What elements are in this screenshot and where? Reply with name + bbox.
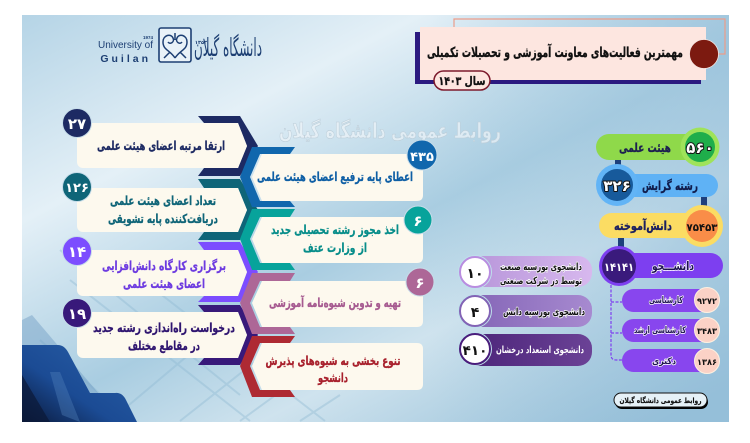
stat: هیئت علمی	[596, 128, 720, 166]
sub stat: کارشناسی: کارشناسی	[649, 296, 684, 306]
card: درخواست راه‌اندازی: در مقاطع مختلف	[128, 338, 200, 353]
pill: بورسیه صنعت: توسط در شرکت صنعتی	[500, 276, 582, 287]
card: تعداد اعضای	[62, 172, 258, 240]
stat: رشته گرایش: ۳۲۶	[603, 177, 631, 195]
pill: استعداد درخشان	[458, 332, 592, 366]
decoration: bottom-left dark shapes	[22, 315, 137, 422]
stat: رشته گرایش	[596, 164, 718, 206]
stat: دانش‌آموخته: ۷۵۴۵۳	[686, 222, 718, 234]
card: درخواست راه‌اندازی: ۱۹	[68, 305, 86, 323]
stat: دانشجو: دانشـــجو	[651, 259, 694, 274]
pill: بورسیه صنعت: ۱۰	[466, 266, 484, 282]
card: اخذ مجوز	[240, 206, 432, 270]
dashed tree connector	[611, 285, 622, 360]
stat: هیئت علمی: هیئت علمی	[619, 140, 671, 155]
logo: University of Guilan	[98, 28, 262, 65]
card: تنوع بخشی: دانشجو	[317, 370, 348, 385]
pill: بورسیه دانش	[458, 294, 592, 328]
logo English text	[98, 35, 153, 65]
card: ارتقا مرتبه: ۲۷	[68, 115, 86, 133]
card: تهیه و تدوین: تهیه و تدوین شیوه‌نامه آموزشی	[269, 295, 401, 310]
pill: استعداد درخشان: ۴۱۰	[463, 343, 487, 359]
card: تعداد اعضای: دریافت‌کننده پایه تشویقی	[108, 211, 218, 226]
stat: هیئت علمی: ۵۶۰	[686, 139, 714, 157]
logo English text: Guilan	[100, 53, 151, 65]
stat: دانش‌آموخته: دانش‌آموخته	[614, 218, 672, 233]
card: درخواست راه‌اندازی: درخواست راه‌اندازی رشته جدید	[93, 320, 235, 335]
card: برگزاری کارگاه: اعضای هیئت علمی	[123, 276, 205, 291]
year badge	[434, 71, 490, 90]
card: برگزاری کارگاه: ۱۴	[68, 243, 86, 261]
sub stat: کارشناسی ارشد	[622, 318, 720, 342]
card: ارتقا مرتبه: ارتقا مرتبه اعضای هیئت علمی	[97, 138, 225, 153]
card: تعداد اعضای: تعداد اعضای هیئت علمی	[110, 193, 216, 208]
sub stat: کارشناسی ارشد: ۳۴۸۳	[697, 327, 718, 337]
sub stat: کارشناسی ارشد: کارشناسی ارشد	[634, 326, 687, 336]
pill: بورسیه دانش: ۴	[471, 305, 480, 321]
year badge: سال ۱۴۰۳	[438, 74, 486, 88]
card: اعطای پایه: اعطای پایه ترفیع اعضای هیئت علمی	[257, 169, 413, 184]
sub stat: کارشناسی	[622, 288, 720, 312]
card: درخواست راه‌اندازی	[62, 298, 258, 365]
connectors	[615, 158, 707, 254]
logo emblem	[159, 28, 191, 62]
pill: بورسیه دانش: دانشجوی بورسیه دانش	[503, 307, 585, 318]
stat: دانشجو: ۱۴۱۴۱	[604, 260, 634, 274]
title panel	[415, 19, 725, 90]
card: تنوع بخشی	[240, 336, 423, 397]
sub stat: دکتری: دکتری	[652, 357, 676, 367]
text: دانشگاه گیلان	[194, 33, 262, 62]
sub stat: دکتری	[622, 348, 720, 374]
card: اعطای پایه: ۴۳۵	[410, 150, 434, 165]
pill: بورسیه صنعت: دانشجوی بورسیه صنعت	[500, 262, 582, 273]
stat: دانشجو	[599, 246, 723, 286]
watermark: روابط عمومی دانشگاه گیلان	[279, 118, 501, 143]
card: اخذ مجوز: اخذ مجوز رشته تحصیلی جدید	[271, 222, 399, 237]
card: تنوع بخشی: تنوع بخشی به شیوه‌های پذیرش	[266, 353, 400, 368]
card: تهیه و تدوین: ۶	[415, 274, 425, 292]
card: اخذ مجوز: از وزارت عتف	[303, 240, 367, 255]
logo English text: University of	[98, 40, 153, 51]
title circle	[690, 40, 718, 68]
sub stat: کارشناسی: ۹۲۷۲	[697, 297, 718, 307]
card: ارتقا مرتبه	[62, 108, 258, 176]
card: برگزاری کارگاه	[62, 236, 258, 302]
stat: دانش‌آموخته	[599, 205, 723, 247]
card: برگزاری کارگاه: برگزاری کارگاه دانش‌افزایی	[102, 258, 226, 273]
stat: رشته گرایش: رشته گرایش	[642, 178, 698, 193]
logo: University of Guilan: ۱۳۵۳	[195, 40, 207, 46]
card: تهیه و تدوین	[240, 268, 434, 334]
badge: روابط عمومی	[614, 393, 708, 409]
card: اخذ مجوز: ۶	[413, 212, 423, 230]
sub stat: دکتری: ۱۳۸۶	[697, 358, 717, 368]
logo English text: 1974	[143, 35, 153, 40]
badge: روابط عمومی: روابط عمومی دانشگاه گیلان	[620, 396, 702, 405]
pill: استعداد درخشان: دانشجوی استعداد درخشان	[496, 345, 584, 356]
card: اعطای پایه	[240, 140, 437, 207]
card: تعداد اعضای: ۱۲۶	[65, 181, 89, 196]
pill: بورسیه صنعت	[458, 255, 592, 289]
